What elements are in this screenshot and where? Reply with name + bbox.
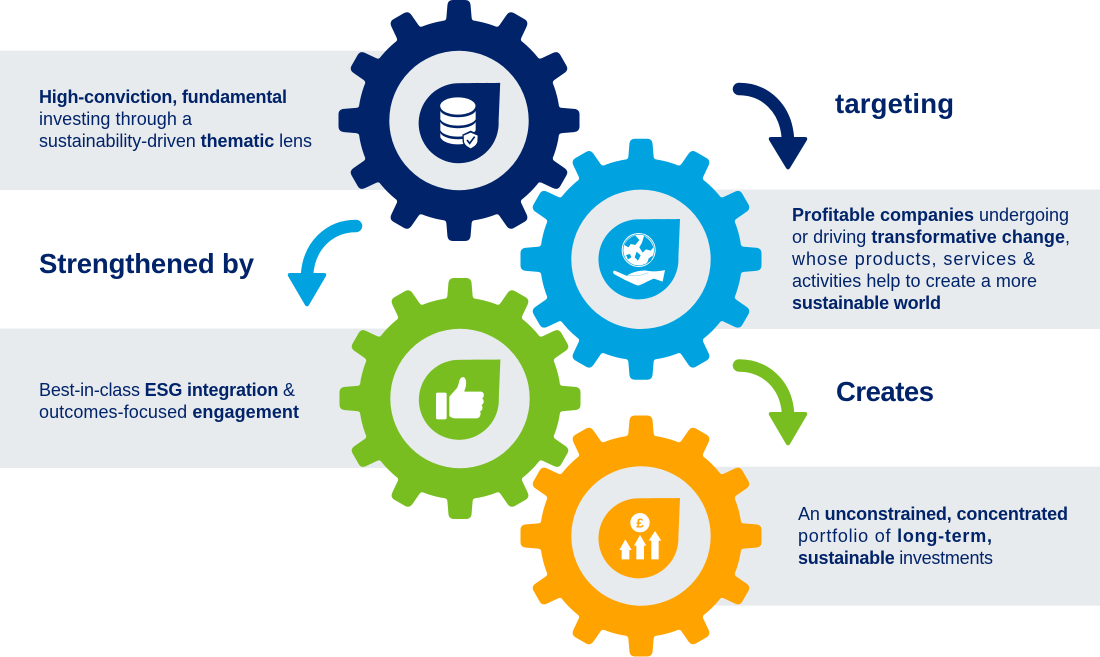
- gear: blue: [520, 139, 762, 380]
- arrow: light blue: [288, 226, 356, 306]
- text block: navy row: High-conviction, fundamental: [39, 87, 287, 107]
- gear: navy: [338, 0, 580, 241]
- band: orange row background: [641, 467, 1100, 606]
- text block: navy row: [39, 87, 312, 151]
- drop: green: [419, 360, 500, 440]
- icon: pound coin with rising arrows: [619, 513, 661, 559]
- icon: pound coin with rising arrows: £: [636, 515, 644, 530]
- arrow: green: [739, 366, 807, 446]
- heading: Strengthened by: Strengthened by: [39, 248, 255, 279]
- text block: green row: outcomes-focused engagement: [39, 402, 299, 422]
- text block: blue row: sustainable world: [792, 293, 941, 313]
- icon: thumbs up: [436, 377, 484, 419]
- text block: orange row: portfolio of long-term,: [798, 526, 992, 546]
- band: blue row background: [641, 190, 1100, 329]
- text block: navy row: sustainability-driven thematic lens: [39, 131, 312, 151]
- text block: blue row: [791, 205, 1070, 313]
- icon: database with shield: [440, 97, 479, 150]
- drop: orange: [598, 498, 680, 578]
- text block: navy row: investing through a: [39, 109, 193, 129]
- band: green row background: [0, 328, 460, 468]
- gear: green: [340, 278, 580, 519]
- text block: blue row: activities help to create a more: [792, 271, 1037, 291]
- text block: orange row: An unconstrained, concentrated: [798, 504, 1068, 524]
- drop: blue: [598, 219, 680, 299]
- icon: hand holding globe: [613, 233, 665, 286]
- band: navy row background: [0, 51, 459, 190]
- heading: targeting: targeting: [835, 88, 954, 119]
- drop: navy: [419, 83, 500, 163]
- text block: blue row: whose products, services &: [791, 249, 1035, 269]
- gear: orange: [520, 416, 762, 656]
- text block: orange row: [798, 504, 1068, 568]
- text block: blue row: Profitable companies undergoing: [792, 205, 1069, 225]
- text block: blue row: or driving transformative change,: [792, 227, 1070, 247]
- arrow: navy: [739, 89, 807, 170]
- text block: green row: Best-in-class ESG integration &: [39, 380, 295, 400]
- heading: Creates: Creates: [836, 376, 934, 407]
- text block: green row: [39, 380, 299, 422]
- text block: orange row: sustainable investments: [798, 548, 993, 568]
